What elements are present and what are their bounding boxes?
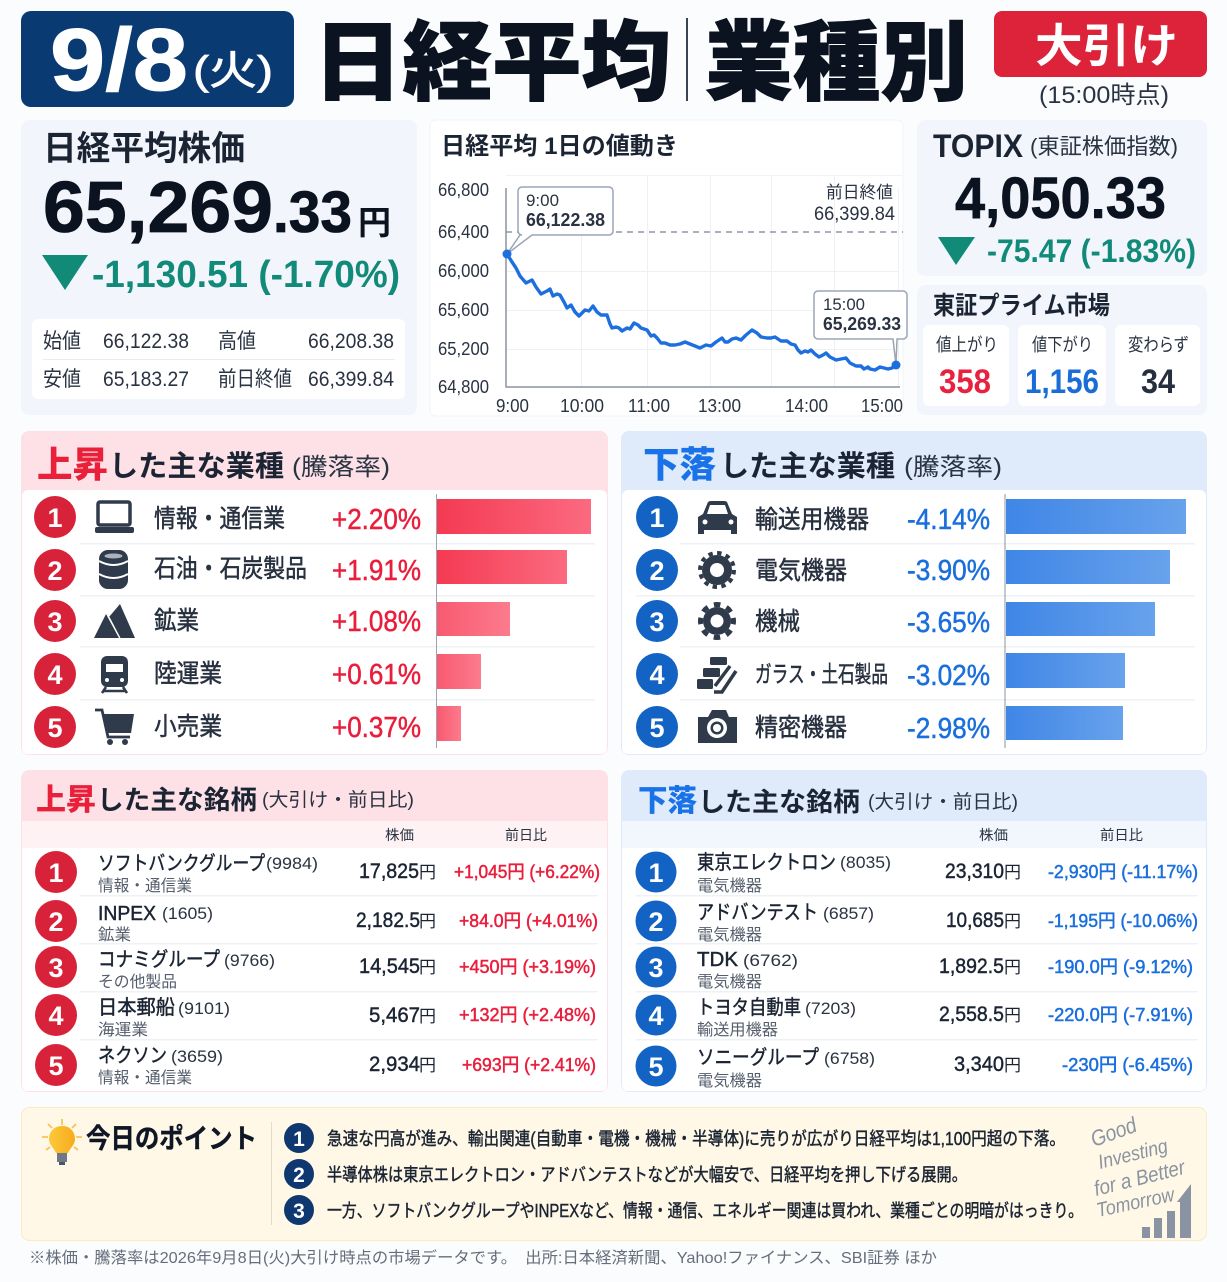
panel: TSE Prime market: 東証プライム市場	[933, 292, 1110, 320]
icon: train	[101, 656, 128, 693]
heading: falling sectors: した主な業種	[720, 450, 895, 483]
price value	[43, 168, 391, 248]
stock 4: Toyota Motor	[636, 994, 1193, 1039]
stock 2: INPEX: 2,182.5	[356, 909, 420, 932]
motto: good investing: for a Better	[1092, 1156, 1188, 1201]
row 2: electrical machinery: -3.90%	[907, 555, 990, 587]
x axis labels: 11:00	[628, 396, 670, 416]
panel: rising sectors	[21, 431, 608, 755]
stock 3: TDK: -190.0円 (-9.12%)	[1048, 957, 1193, 977]
row 5: retail: 小売業	[154, 713, 222, 741]
row 3: machinery: -3.65%	[907, 607, 990, 639]
row 1: transport equipment: 輸送用機器	[755, 506, 869, 534]
y axis labels: 65,600	[438, 300, 489, 320]
y axis labels: 66,000	[438, 261, 489, 281]
callout: 9:00 open: 66,122.38	[526, 210, 605, 230]
point 1: 急速な円高が進み、輸出関連(自動車・電機・機械・半導体)に売りが広がり日経平均は1,100円超の下落。	[327, 1129, 1065, 1149]
card: decliners: 値下がり	[1032, 335, 1093, 355]
stock 2: INPEX	[35, 900, 598, 944]
stock 5: Nexon: 2,934	[369, 1053, 420, 1076]
stock 5: Nexon: +693円 (+2.41%)	[462, 1055, 596, 1075]
stock 3: Konami Group	[35, 946, 596, 991]
stock 4: Toyota Motor: (7203)	[805, 999, 856, 1018]
heading: Nikkei stock price: 日経平均株価	[43, 130, 245, 168]
stock 4: NYK Line: 5,467	[369, 1004, 420, 1027]
panel: TOPIX: TOPIX	[933, 128, 1024, 164]
row 2: electrical machinery: 電気機器	[755, 557, 847, 585]
y axis labels: 66,400	[438, 222, 489, 242]
stock 1: SoftBank Group: 情報・通信業	[98, 877, 192, 895]
open high low close table: 安値	[43, 368, 81, 391]
panel: Nikkei average price	[21, 120, 417, 415]
stock 1: SoftBank Group: ソフトバンクグループ	[98, 852, 265, 875]
point 3: 一方、ソフトバンクグループやINPEXなど、情報・通信、エネルギー関連は買われ、業種ごとの明暗がはっきり。	[327, 1201, 1083, 1221]
x axis labels: 14:00	[785, 396, 828, 416]
row 5: precision instruments: 精密機器	[755, 714, 847, 742]
stock 5: Sony Group: 電気機器	[697, 1072, 762, 1090]
stock 1: Tokyo Electron: (8035)	[840, 853, 891, 872]
stock 4: Toyota Motor: 4	[648, 1001, 664, 1031]
stock 5: Sony Group: 5	[648, 1052, 664, 1082]
stock 4: Toyota Motor: 2,558.5	[939, 1003, 1004, 1026]
stock 3: TDK: TDK	[697, 949, 739, 971]
icon: light bulb	[42, 1119, 82, 1165]
row 1: information and communication: 情報・通信業	[154, 505, 285, 533]
row 4: glass and stone	[636, 653, 990, 695]
open high low close table: 高値	[218, 330, 256, 353]
row 4: glass and stone: 4	[649, 660, 665, 690]
x axis labels: 9:00	[496, 396, 529, 416]
row 4: land transport: 4	[47, 660, 63, 690]
stock 4: NYK Line: 海運業	[98, 1021, 148, 1039]
point 2: 2	[293, 1164, 305, 1187]
row 2: oil and coal	[34, 549, 421, 591]
icon: glass and bricks	[697, 657, 736, 692]
x axis labels: 10:00	[560, 396, 604, 416]
stock 2: INPEX: INPEX	[98, 903, 156, 925]
stock 1: Tokyo Electron: 円	[1004, 863, 1021, 882]
stock 2: INPEX: (1605)	[162, 904, 213, 923]
axes	[506, 188, 900, 387]
column headers	[979, 827, 1143, 843]
header: main title: 業種別	[705, 15, 968, 112]
point 2: 半導体株は東京エレクトロン・アドバンテストなどが大幅安で、日経平均を押し下げる展開。	[327, 1165, 967, 1185]
panel: TSE Prime market	[917, 285, 1207, 415]
heading: rising stocks: した主な銘柄	[97, 785, 257, 815]
y axis labels	[438, 180, 489, 397]
stock 1: SoftBank Group: (9984)	[266, 854, 318, 873]
stock 2: Advantest: 電気機器	[697, 926, 762, 944]
row 5: precision instruments: -2.98%	[907, 713, 990, 745]
header: date badge: 9/8	[50, 10, 188, 109]
stock 5: Nexon	[35, 1044, 596, 1087]
row 1: transport equipment	[636, 496, 990, 538]
motto: good investing: Tomorrow	[1094, 1184, 1178, 1222]
icon: laptop	[95, 502, 134, 533]
open high low close table: 66,122.38	[103, 330, 189, 353]
open high low close table: 前日終値	[218, 368, 292, 391]
row 3: mining: 鉱業	[154, 607, 199, 635]
panel: falling sectors	[621, 431, 1207, 755]
header: date badge: (火)	[193, 49, 273, 93]
row 1: transport equipment: -4.14%	[907, 504, 990, 536]
stock 1: SoftBank Group: 円	[419, 863, 436, 882]
row 3: mining	[34, 600, 421, 642]
open high low close table	[32, 319, 405, 399]
stock 2: Advantest: 円	[1004, 912, 1021, 931]
stock 5: Nexon: 情報・通信業	[98, 1069, 192, 1087]
motto: good investing: Investing	[1096, 1135, 1170, 1174]
chart title: 日経平均 1日の値動き	[441, 133, 678, 160]
stock 2: Advantest: (6857)	[823, 904, 874, 923]
header: date badge	[21, 10, 294, 109]
heading: rising sectors: (騰落率)	[292, 454, 390, 481]
heading: today's points: 今日のポイント	[86, 1124, 257, 1154]
stock 5: Sony Group: (6758)	[824, 1049, 875, 1068]
row 1: transport equipment: 1	[649, 503, 665, 533]
stock 1: SoftBank Group: 17,825	[359, 860, 419, 883]
previous close label: 前日終値	[826, 183, 893, 202]
stock 2: Advantest: アドバンテスト	[697, 902, 818, 924]
panel: today's points	[22, 1108, 1206, 1240]
stock 3: Konami Group: (9766)	[224, 951, 275, 970]
stock 5: Nexon: ネクソン	[98, 1044, 167, 1067]
header: closing badge: 大引け	[1035, 20, 1178, 72]
footer note: ※株価・騰落率は2026年9月8日(火)大引け時点の市場データです。 出所:日本経済新聞、Yahoo!ファイナンス、SBI証券 ほか	[29, 1248, 937, 1267]
open high low close table: 始値	[43, 330, 81, 353]
stock 2: Advantest: -1,195円 (-10.06%)	[1048, 911, 1198, 931]
stock 2: Advantest: 2	[648, 907, 664, 937]
stock 5: Nexon: (3659)	[171, 1047, 223, 1066]
point 3: 3	[293, 1200, 305, 1223]
stock 4: Toyota Motor: トヨタ自動車	[697, 996, 801, 1019]
heading: rising sectors: 上昇	[37, 444, 108, 485]
row 4: glass and stone: ガラス・土石製品	[755, 661, 888, 687]
price value: 円	[358, 204, 391, 241]
x axis labels	[496, 396, 903, 416]
stock 4: NYK Line	[35, 994, 596, 1039]
stock 1: SoftBank Group: +1,045円 (+6.22%)	[454, 862, 600, 882]
stock 2: INPEX: 円	[419, 912, 436, 931]
panel: TOPIX: 4,050.33	[955, 166, 1166, 231]
header: main title: 日経平均	[313, 15, 671, 112]
price line	[507, 254, 896, 370]
column headers	[385, 827, 547, 843]
stock 4: NYK Line: +132円 (+2.48%)	[459, 1005, 596, 1025]
column headers: 株価	[979, 827, 1008, 843]
icon: shopping cart	[95, 710, 134, 745]
stock 1: Tokyo Electron: -2,930円 (-11.17%)	[1048, 862, 1198, 882]
stock 3: TDK	[636, 946, 1193, 991]
callout: 15:00 close: 65,269.33	[823, 314, 901, 334]
panel: intraday line chart	[430, 120, 907, 416]
stock 4: NYK Line: 日本郵船	[98, 996, 175, 1019]
change down: -1,130.51 (-1.70%)	[92, 254, 400, 296]
sector bars	[436, 494, 591, 748]
stock 5: Sony Group: 3,340	[954, 1053, 1004, 1076]
row 1: information and communication: +2.20%	[332, 504, 421, 536]
callout: 15:00 close: 15:00	[823, 295, 865, 314]
header: main title	[313, 15, 968, 112]
row 5: retail: +0.37%	[332, 712, 421, 744]
icon: camera	[698, 710, 737, 743]
open high low close table: 66,399.84	[308, 368, 394, 391]
stock 4: NYK Line: 円	[419, 1007, 436, 1026]
row 3: machinery: 3	[649, 607, 665, 637]
stock 5: Sony Group	[636, 1046, 1193, 1090]
row 4: land transport: 陸運業	[154, 660, 222, 688]
row 5: precision instruments: 5	[649, 713, 665, 743]
callout: 9:00 open	[502, 187, 613, 258]
point 3	[284, 1195, 1083, 1225]
row 2: electrical machinery	[636, 549, 990, 591]
card: unchanged: 34	[1141, 363, 1175, 401]
row 4: glass and stone: -3.02%	[907, 660, 990, 692]
stock 1: SoftBank Group: 1	[48, 858, 64, 888]
motto: good investing: Good	[1087, 1112, 1140, 1152]
icon: gear	[700, 604, 734, 638]
icon: rising bars	[1142, 1184, 1191, 1238]
stock 1: SoftBank Group	[35, 851, 600, 895]
stock 4: NYK Line: 4	[48, 1001, 64, 1031]
stock 3: Konami Group: 円	[419, 958, 436, 977]
stock 3: TDK: 3	[648, 953, 664, 983]
panel: falling stocks	[621, 770, 1207, 1092]
heading: falling sectors: 下落	[643, 444, 716, 485]
heading: falling sectors: (騰落率)	[904, 454, 1002, 481]
stock 3: TDK: 1,892.5	[939, 955, 1004, 978]
heading: falling stocks: 下落	[638, 785, 697, 818]
sector bars	[1004, 494, 1186, 748]
stock 3: TDK: 電気機器	[697, 973, 762, 991]
heading: rising sectors: した主な業種	[109, 450, 284, 483]
row 5: precision instruments	[636, 706, 990, 748]
row 2: oil and coal: 2	[47, 556, 63, 586]
stock 3: Konami Group: その他製品	[98, 973, 177, 991]
row 5: retail: 5	[47, 713, 63, 743]
stock 5: Nexon: 5	[48, 1051, 64, 1081]
row 3: machinery: 機械	[755, 608, 800, 636]
point 1: 1	[293, 1128, 305, 1151]
stock 5: Sony Group: 円	[1004, 1056, 1021, 1075]
panel: TOPIX: (東証株価指数)	[1030, 134, 1178, 159]
row 4: land transport: +0.61%	[332, 659, 421, 691]
stock 4: Toyota Motor: 輸送用機器	[697, 1021, 778, 1039]
row 3: mining: +1.08%	[332, 606, 421, 638]
y axis labels: 66,800	[438, 180, 489, 200]
row 3: machinery	[636, 600, 990, 642]
heading: rising sectors	[37, 444, 390, 485]
card: advancers: 358	[939, 363, 991, 401]
y axis labels: 65,200	[438, 339, 489, 359]
heading: falling stocks: (大引け・前日比)	[868, 791, 1018, 813]
stock 2: INPEX: 2	[48, 907, 64, 937]
card: unchanged: 変わらず	[1128, 335, 1189, 355]
row 2: electrical machinery: 2	[649, 556, 665, 586]
column headers: 前日比	[505, 827, 547, 843]
header: closing badge: (15:00時点)	[1039, 82, 1169, 109]
row 2: oil and coal: +1.91%	[332, 555, 421, 587]
x axis labels: 15:00	[861, 396, 903, 416]
previous close label: 66,399.84	[814, 204, 895, 225]
stock 3: TDK: (6762)	[743, 951, 798, 970]
card: advancers: 値上がり	[936, 335, 998, 355]
stock 4: NYK Line: (9101)	[178, 999, 230, 1018]
row 3: mining: 3	[47, 607, 63, 637]
panel: rising stocks	[21, 770, 608, 1092]
stock 1: Tokyo Electron	[636, 851, 1198, 895]
card: unchanged	[1115, 325, 1200, 406]
callout: 15:00 close	[814, 291, 907, 370]
stock 2: INPEX: 鉱業	[98, 926, 131, 944]
header: closing badge	[994, 11, 1207, 109]
stock 5: Nexon: 円	[419, 1056, 436, 1075]
stock 3: Konami Group: +450円 (+3.19%)	[459, 957, 596, 977]
stock 1: Tokyo Electron: 1	[648, 858, 664, 888]
y axis labels: 64,800	[438, 377, 489, 397]
heading: falling stocks: した主な銘柄	[698, 787, 860, 817]
row 4: land transport	[34, 653, 421, 695]
stock 4: Toyota Motor: 円	[1004, 1006, 1021, 1025]
stock 2: Advantest: 10,685	[946, 909, 1004, 932]
stock 1: Tokyo Electron: 電気機器	[697, 877, 762, 895]
open high low close table: 66,208.38	[308, 330, 394, 353]
icon: mountains	[94, 604, 135, 638]
price value: .33	[273, 180, 352, 245]
row 5: retail	[34, 706, 421, 748]
heading: rising stocks: (大引け・前日比)	[262, 789, 414, 811]
column headers: 株価	[385, 827, 414, 843]
icon: car	[698, 501, 737, 534]
heading: rising stocks: 上昇	[36, 784, 96, 817]
card: decliners	[1018, 325, 1106, 406]
stock 5: Sony Group: -230円 (-6.45%)	[1062, 1055, 1193, 1075]
stock 3: TDK: 円	[1004, 958, 1021, 977]
icon: oil barrel	[99, 550, 128, 589]
icon: chip gear	[700, 553, 734, 587]
column headers: 前日比	[1100, 827, 1143, 843]
stock 3: Konami Group: 14,545	[359, 955, 420, 978]
row 2: oil and coal: 石油・石炭製品	[154, 555, 307, 583]
stock 2: Advantest	[636, 900, 1198, 944]
stock 3: Konami Group: 3	[48, 953, 64, 983]
open high low close table: 65,183.27	[103, 368, 189, 391]
panel: TOPIX	[917, 120, 1207, 276]
x axis labels: 13:00	[698, 396, 741, 416]
card: advancers	[923, 325, 1009, 406]
row 1: information and communication	[34, 496, 421, 538]
stock 3: Konami Group: コナミグループ	[98, 948, 220, 971]
stock 2: INPEX: +84.0円 (+4.01%)	[459, 911, 598, 931]
stock 4: Toyota Motor: -220.0円 (-7.91%)	[1048, 1005, 1193, 1025]
stock 1: Tokyo Electron: 東京エレクトロン	[697, 851, 836, 874]
previous close label	[814, 183, 895, 225]
previous close dashed line	[506, 231, 903, 233]
callout: 9:00 open: 9:00	[526, 191, 559, 210]
point 2	[284, 1159, 967, 1189]
stock 5: Sony Group: ソニーグループ	[697, 1046, 819, 1069]
heading: falling stocks	[638, 785, 1018, 818]
heading: rising stocks	[36, 784, 414, 817]
motto: good investing	[1087, 1112, 1188, 1222]
point 1	[284, 1123, 1065, 1153]
price value: 65,269	[43, 168, 273, 248]
stock 1: Tokyo Electron: 23,310	[945, 860, 1004, 883]
panel: TOPIX: -75.47 (-1.83%)	[987, 233, 1196, 269]
card: decliners: 1,156	[1025, 363, 1099, 401]
heading: falling sectors	[643, 444, 1002, 485]
row 1: information and communication: 1	[47, 503, 63, 533]
